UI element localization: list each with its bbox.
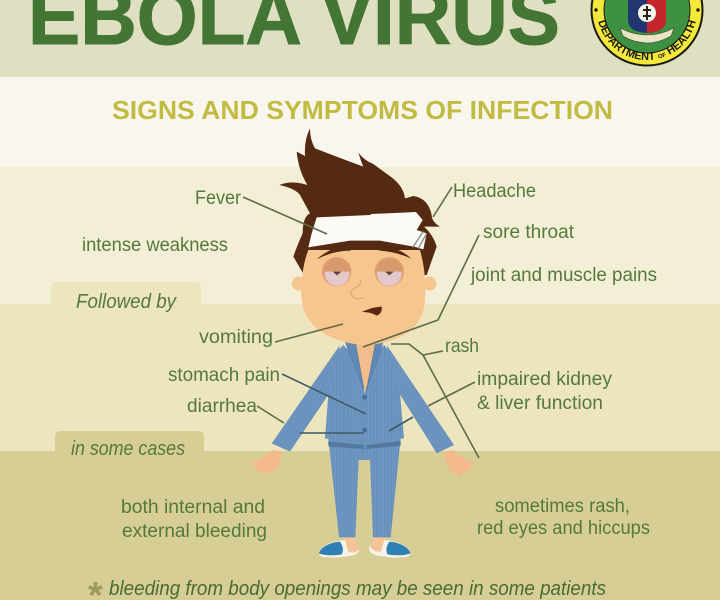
waistband bbox=[328, 441, 401, 449]
right sleeve bbox=[387, 345, 454, 453]
eyebrows bbox=[317, 245, 351, 259]
tab: in some cases: in some cases bbox=[71, 438, 185, 460]
left hand bbox=[251, 450, 282, 475]
right slipper and foot bbox=[369, 537, 411, 558]
figure: sick man head bbox=[279, 128, 440, 345]
mouth bbox=[362, 307, 382, 316]
figure: sick man body bbox=[251, 337, 474, 558]
jacket torso bbox=[325, 345, 404, 443]
label: sore throat: sore throat bbox=[483, 222, 575, 243]
right eye bbox=[375, 257, 404, 286]
label: headache: Headache bbox=[453, 181, 536, 202]
label: vomiting: vomiting bbox=[199, 327, 273, 348]
headband bbox=[308, 212, 427, 249]
nose bbox=[351, 280, 363, 299]
label: both internal and external bleeding bbox=[121, 497, 267, 542]
buttons bbox=[362, 395, 367, 400]
leader lines bbox=[243, 187, 479, 458]
label: sometimes rash, red eyes and hiccups: sometimes rash, bbox=[495, 496, 630, 517]
tab: followed by bbox=[51, 282, 201, 313]
face bbox=[301, 250, 425, 345]
label: impaired kidney and liver function: impaired kidney bbox=[477, 369, 612, 390]
emblem: Department of Health seal bbox=[590, 0, 704, 66]
collar bbox=[345, 340, 383, 389]
ears bbox=[292, 277, 305, 291]
header band bbox=[0, 0, 720, 77]
label: fever: Fever bbox=[195, 188, 242, 209]
hair bbox=[279, 128, 440, 277]
pants bbox=[328, 438, 401, 537]
subtitle band bbox=[0, 77, 720, 167]
label: both internal and external bleeding: both internal and bbox=[121, 497, 265, 518]
background band: in some cases bbox=[0, 451, 720, 600]
label: joint and muscle pains: joint and muscle pains bbox=[470, 265, 657, 286]
neck bbox=[352, 337, 377, 393]
left eye bbox=[322, 257, 351, 286]
label: both internal and external bleeding: external bleeding bbox=[122, 521, 267, 542]
label: sometimes rash, red eyes and hiccups: red eyes and hiccups bbox=[477, 518, 650, 539]
label: impaired kidney and liver function: & liver function bbox=[477, 393, 603, 414]
label: impaired kidney and liver function bbox=[477, 369, 612, 414]
label: intense weakness: intense weakness bbox=[82, 235, 228, 256]
footnote: bleeding from body openings may be seen in some patients bbox=[109, 578, 606, 600]
background band: followed by bbox=[0, 304, 720, 452]
left slipper and foot bbox=[319, 537, 359, 558]
tab: followed by: Followed by bbox=[76, 291, 177, 313]
left sleeve bbox=[272, 345, 340, 452]
tab: in some cases bbox=[55, 431, 204, 460]
background band: early symptoms bbox=[0, 167, 720, 305]
label: diarrhea: diarrhea bbox=[187, 396, 257, 417]
subtitle: SIGNS AND SYMPTOMS OF INFECTION bbox=[112, 95, 613, 125]
label: sometimes rash, red eyes and hiccups bbox=[477, 496, 650, 539]
label: rash: rash bbox=[445, 336, 479, 357]
label: stomach pain: stomach pain bbox=[168, 365, 280, 386]
right hand bbox=[444, 450, 474, 477]
emblem: Department of Health seal: DEPARTMENT OF HEALTH bbox=[598, 20, 696, 60]
